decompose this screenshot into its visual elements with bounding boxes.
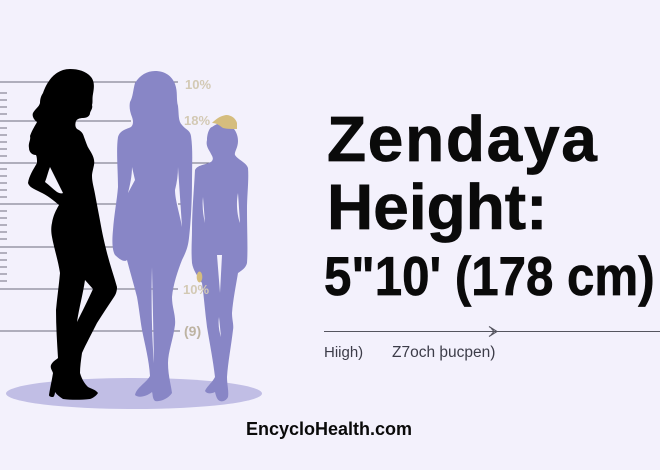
footer source: EncycloHealth.com (246, 419, 412, 439)
black silhouette (28, 69, 117, 400)
caption left: Hiigh) (324, 344, 363, 361)
tan hair accent (212, 115, 237, 129)
percent label 1: 10% (185, 77, 211, 92)
caption right: Z7och þucpen) (392, 344, 495, 361)
tan drop accent (197, 272, 202, 282)
height grid lines (0, 82, 210, 331)
title: Height: Height: (327, 171, 547, 243)
label (9): (9) (184, 323, 201, 339)
title: Zendaya: Zendaya (327, 103, 599, 175)
ground shadow ellipse (6, 378, 262, 409)
ruler ticks (0, 93, 7, 281)
short purple silhouette (192, 123, 248, 401)
arrow line (324, 326, 660, 336)
percent label 3: 10% (183, 282, 209, 297)
tall purple silhouette (112, 71, 192, 401)
subtitle: height value: 5"10' (178 cm) (324, 245, 655, 307)
percent label 2: 18% (184, 113, 210, 128)
